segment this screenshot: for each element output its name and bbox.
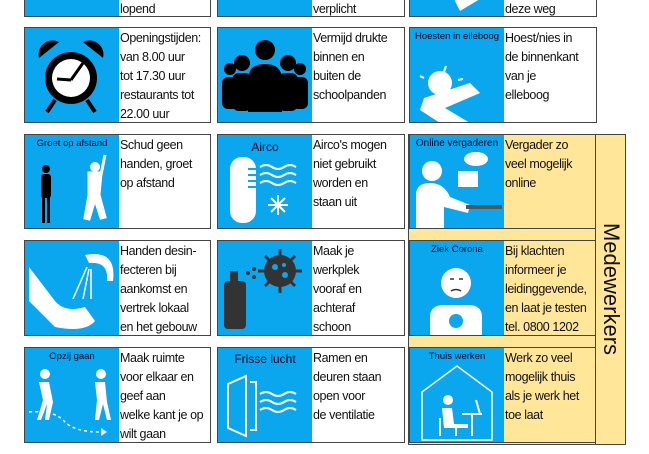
card: thuis werken: Werk zo veel xyxy=(505,351,572,365)
card: ziek corona: informeer je xyxy=(505,263,566,277)
card: thuis werken: als je werk het xyxy=(505,389,579,403)
card: openingstijden: restaurants tot xyxy=(120,88,194,102)
card: thuis werken: mogelijk thuis xyxy=(505,370,575,384)
icon: video call: Online vergaderen xyxy=(416,138,498,149)
card: opzij gaan: Maak ruimte xyxy=(120,351,184,365)
row 0 card 1 xyxy=(24,0,211,17)
card: hoesten: Hoest/nies in xyxy=(505,31,572,45)
icon: home office: Thuis werken xyxy=(429,351,485,362)
icon: two persons: Groet op afstand xyxy=(37,138,107,149)
card: opzij gaan xyxy=(24,347,211,443)
icon: spray and virus xyxy=(218,241,312,335)
card: werkplek: achteraf xyxy=(313,301,355,315)
card: opzij gaan: wilt gaan xyxy=(120,427,166,441)
card: hoesten: de binnenkant xyxy=(505,50,578,64)
card: airco xyxy=(217,134,405,229)
card: werkplek: vooraf en xyxy=(313,282,362,296)
icon: home office xyxy=(410,348,504,442)
icon: two persons xyxy=(25,135,119,228)
card: vermijd drukte: binnen en xyxy=(313,50,364,64)
card: groet op afstand: Schud geen xyxy=(120,138,183,152)
card: online vergaderen: veel mogelijk xyxy=(505,157,572,171)
card: ziek corona: en laat je testen xyxy=(505,301,586,315)
card: handen: fecteren bij xyxy=(120,263,176,277)
icon: crowd xyxy=(218,28,312,122)
card: vermijd drukte: Vermijd drukte xyxy=(313,31,387,45)
icon: sick person: Ziek Corona xyxy=(431,244,483,255)
card: werkplek: werkplek xyxy=(313,263,359,277)
icon: elbow cough xyxy=(410,28,504,122)
card: frisse lucht: deuren staan xyxy=(313,370,381,384)
card: hoesten: elleboog xyxy=(505,88,549,102)
row 0 card 2: verplicht xyxy=(313,2,356,16)
card: vermijd drukte: schoolpanden xyxy=(313,88,386,102)
card: frisse lucht: open voor xyxy=(313,389,365,403)
card: hoesten: van je xyxy=(505,69,536,83)
row 0 card 3: deze weg xyxy=(505,2,555,16)
card: openingstijden xyxy=(24,27,211,123)
card: opzij gaan: geef aan xyxy=(120,389,165,403)
card: openingstijden: tot 17.30 uur xyxy=(120,69,185,83)
card: handen: en het gebouw xyxy=(120,320,197,334)
card: groet op afstand xyxy=(24,134,211,229)
icon: video call xyxy=(410,135,504,228)
card: frisse lucht: Ramen en xyxy=(313,351,367,365)
icon: walking persons: Opzij gaan xyxy=(49,351,95,362)
card: airco: worden en xyxy=(313,176,368,190)
card: online vergaderen: Vergader zo xyxy=(505,138,568,152)
card: frisse lucht: de ventilatie xyxy=(313,408,375,422)
sidebar label: Medewerkers xyxy=(599,223,624,355)
row 0 card 2 xyxy=(217,0,405,17)
card: hoesten xyxy=(409,27,597,123)
card: airco: staan uit xyxy=(313,195,357,209)
card: groet op afstand: handen, groet xyxy=(120,157,192,171)
row 0 card 1: lopend xyxy=(120,2,155,16)
card: openingstijden: van 8.00 uur xyxy=(120,50,185,64)
card: opzij gaan: welke kant je op xyxy=(120,408,203,422)
card: ziek corona: tel. 0800 1202 xyxy=(505,320,579,334)
sidebar label xyxy=(595,134,626,445)
card: online vergaderen: online xyxy=(505,176,536,190)
icon: alarm clock xyxy=(25,28,119,122)
card: ziek corona: leidinggevende, xyxy=(505,282,587,296)
yellow staff panel xyxy=(408,134,626,445)
icon: elbow cough: Hoesten in elleboog xyxy=(415,31,499,42)
card: werkplek: schoon xyxy=(313,320,351,334)
card: ziek corona: Bij klachten xyxy=(505,244,564,258)
card: openingstijden: Openingstijden: xyxy=(120,31,201,45)
card: thuis werken: toe laat xyxy=(505,408,543,422)
icon: walking persons xyxy=(25,348,119,442)
card: vermijd drukte: buiten de xyxy=(313,69,361,83)
card: airco: niet gebruikt xyxy=(313,157,376,171)
icon: airco xyxy=(218,135,312,228)
card: opzij gaan: voor elkaar en xyxy=(120,370,194,384)
card: online vergaderen xyxy=(409,134,596,229)
card: werkplek: Maak je xyxy=(313,244,354,258)
card: ziek corona xyxy=(409,240,596,336)
card: frisse lucht xyxy=(217,347,405,443)
icon: open window xyxy=(218,348,312,442)
card: handen: vertrek lokaal xyxy=(120,301,189,315)
icon: sick person xyxy=(410,241,504,335)
card: vermijd drukte xyxy=(217,27,405,123)
icon: airco: Airco xyxy=(251,140,279,154)
card: airco: Airco's mogen xyxy=(313,138,387,152)
icon: washing hands xyxy=(25,241,119,335)
card: handen: aankomst en xyxy=(120,282,187,296)
card: groet op afstand: op afstand xyxy=(120,176,174,190)
card: werkplek xyxy=(217,240,405,336)
icon: open window: Frisse lucht xyxy=(234,352,296,366)
row 0 card 3 xyxy=(409,0,597,17)
card: handen: Handen desin- xyxy=(120,244,196,258)
card: openingstijden: 22.00 uur xyxy=(120,107,169,121)
card: handen xyxy=(24,240,211,336)
card: thuis werken xyxy=(409,347,596,443)
